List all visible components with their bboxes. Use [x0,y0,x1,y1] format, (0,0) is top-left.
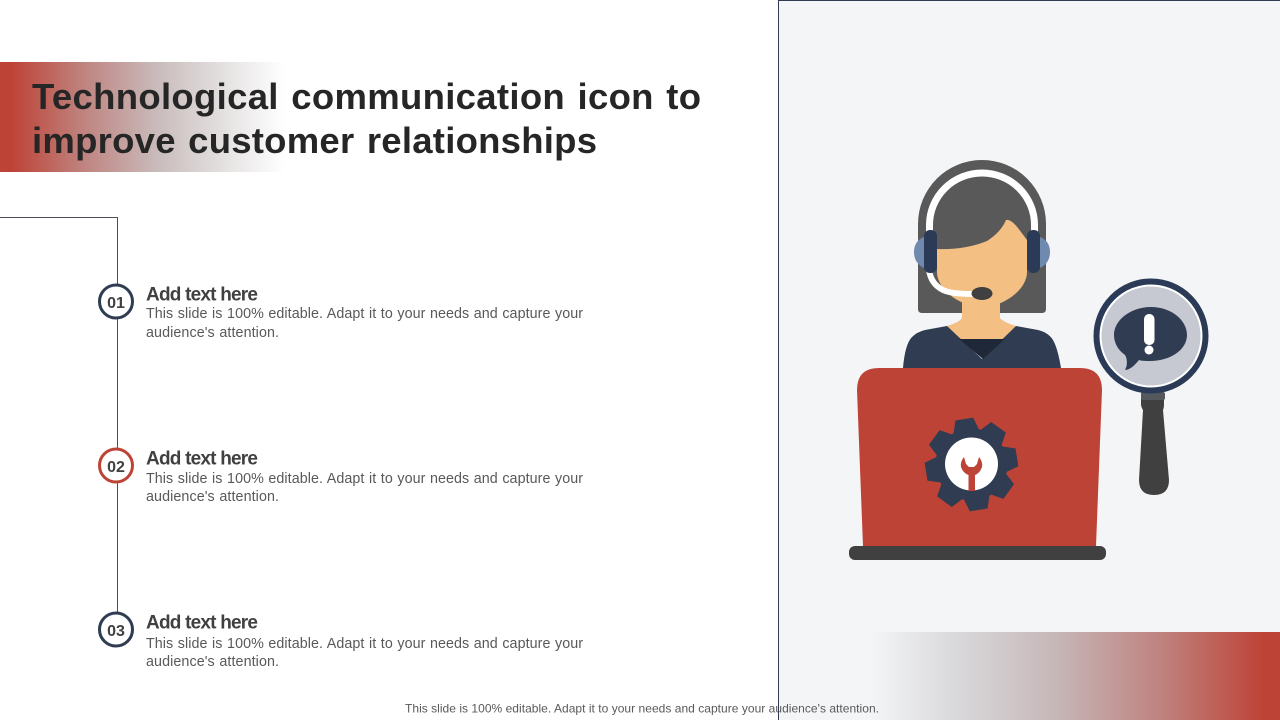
gear [919,412,1024,517]
speech bubble [1114,307,1187,370]
exclamation mark [1144,314,1154,345]
microphone [972,287,992,300]
fringe [934,176,1030,250]
title accent gradient band [0,62,285,172]
icon: support agent with headset [903,160,1061,368]
face [937,212,1027,307]
lens [1102,286,1200,386]
laptop base [849,546,1106,560]
item 03 [100,612,583,670]
number badge 02 [100,449,132,482]
laptop lid [857,368,1102,546]
item 02 [100,448,583,505]
timeline connector line [0,218,118,630]
hair back [918,160,1046,313]
heading 03: Add text here [146,612,258,634]
title [32,76,701,161]
neckline [959,339,1005,359]
description 03 [146,636,583,670]
ear cups [914,237,1050,268]
handle collar [1141,392,1165,400]
item 01 [100,284,583,341]
lens ring [1096,282,1206,390]
description 02: audience's attention. [146,489,279,505]
torso [903,326,1061,368]
icon: laptop with gear [849,368,1106,560]
description 03: This slide is 100% editable. Adapt it to your needs and capture your [146,636,583,652]
number badge 02: 02 [107,459,125,476]
description 01: audience's attention. [146,325,279,341]
headband [930,173,1034,232]
description 01 [146,306,583,341]
microphone boom [929,270,973,294]
icon: magnifier with alert speech bubble [1096,282,1206,495]
panel: right background [778,0,1280,720]
magnifier handle [1139,394,1169,495]
footer note: This slide is 100% editable. Adapt it to your needs and capture your audience's attention. [405,702,879,716]
number badge 01 [100,285,132,318]
description 02: This slide is 100% editable. Adapt it to your needs and capture your [146,471,583,487]
title: improve customer relationships [32,120,597,161]
wrench [961,457,982,491]
description 03: audience's attention. [146,654,279,670]
heading 01: Add text here [146,284,258,306]
bottom right gradient band [870,632,1280,720]
neck [947,300,1016,346]
gear centre [945,438,998,490]
number badge 03: 03 [107,623,125,640]
number badge 01: 01 [107,295,125,312]
heading 02: Add text here [146,448,258,470]
number badge 03 [100,613,132,646]
description 02 [146,471,583,505]
headset ear pads [924,230,937,273]
description 01: This slide is 100% editable. Adapt it to your needs and capture your [146,306,583,322]
title: Technological communication icon to [32,76,701,117]
